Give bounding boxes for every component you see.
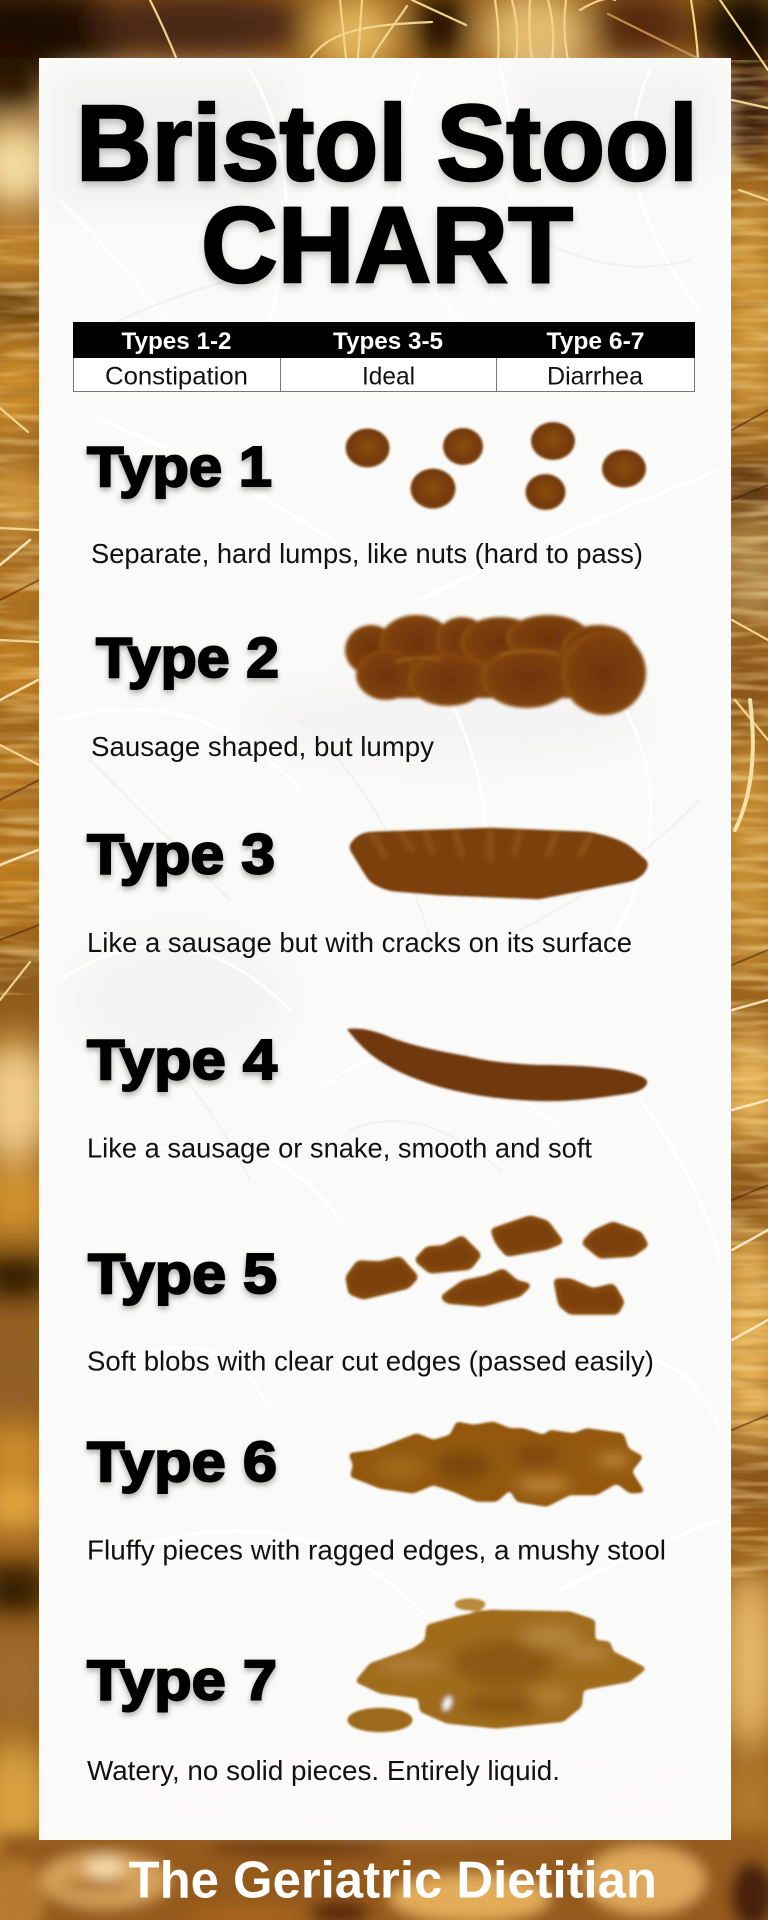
table: type categories: Types 3-5 [333, 328, 443, 355]
type 4 description: Like a sausage or snake, smooth and soft [87, 1132, 592, 1164]
table: type categories: Types 1-2 [122, 328, 232, 355]
type 7 label: Type 7 [87, 1648, 277, 1712]
type 3 label: Type 3 [87, 822, 275, 886]
table: type categories: Diarrhea [547, 362, 643, 390]
background strands [0, 0, 768, 1430]
type 2 label: Type 2 [96, 626, 279, 690]
icon: type 4 smooth snake [347, 1029, 647, 1101]
icon: type 5 soft blobs [347, 1217, 647, 1313]
table: type categories: Type 6-7 [546, 328, 644, 355]
type 1 description: Separate, hard lumps, like nuts (hard to pass) [91, 538, 643, 569]
type 4 label: Type 4 [87, 1028, 277, 1092]
type 7 description: Watery, no solid pieces. Entirely liquid. [87, 1755, 560, 1786]
table: type categories: Constipation [105, 362, 248, 390]
table: type categories: Ideal [362, 362, 415, 390]
type 3 description: Like a sausage but with cracks on its surface [87, 927, 632, 958]
icon: type 2 lumpy sausage [345, 615, 646, 715]
title [76, 82, 698, 305]
type 6 label: Type 6 [87, 1430, 277, 1494]
type 5 label: Type 5 [88, 1242, 277, 1306]
type 1 label: Type 1 [87, 435, 272, 499]
table: type categories [73, 322, 695, 392]
icon: type 3 cracked sausage [349, 828, 648, 899]
icon: type 1 separate hard lumps [346, 422, 646, 510]
icon: type 6 fluffy ragged pieces [348, 1422, 645, 1507]
icon: type 7 watery puddle [347, 1599, 647, 1732]
title: CHART [201, 184, 573, 305]
type 5 description: Soft blobs with clear cut edges (passed easily) [87, 1346, 654, 1376]
type 2 description: Sausage shaped, but lumpy [91, 731, 434, 762]
type 6 description: Fluffy pieces with ragged edges, a mushy stool [87, 1534, 666, 1566]
title: Bristol Stool [76, 82, 698, 203]
footer: brand name: The Geriatric Dietitian [128, 1852, 657, 1910]
